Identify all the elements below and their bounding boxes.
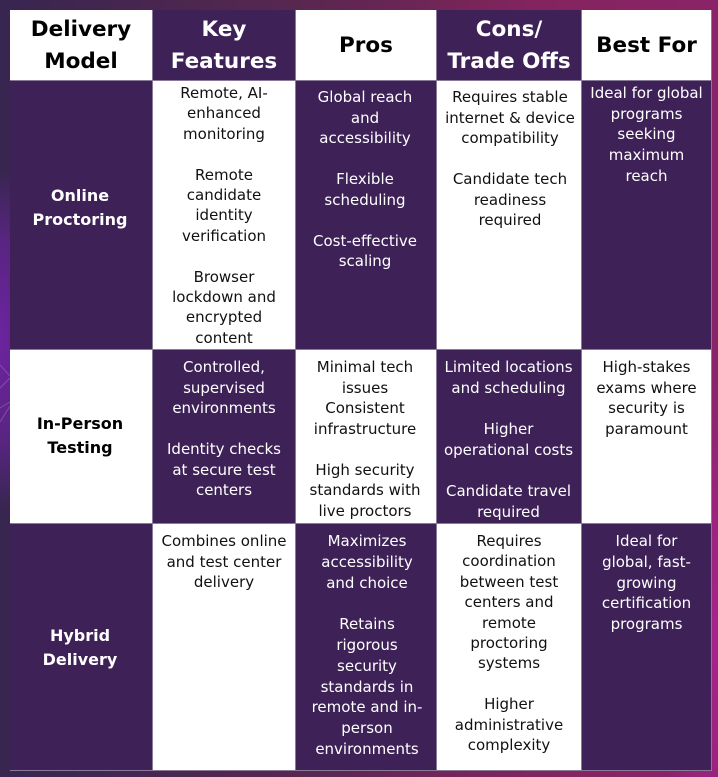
in-person: cons: and scheduling xyxy=(451,379,566,397)
in-person: best for: High-stakes xyxy=(602,358,690,376)
in-person: key features xyxy=(153,350,296,524)
hybrid: key features: delivery xyxy=(194,573,254,591)
row label: In-Person Testing: In-Person xyxy=(37,414,123,433)
row label: In-Person Testing: Testing xyxy=(47,438,113,457)
online: key features: enhanced xyxy=(187,104,261,122)
in-person: cons: operational costs xyxy=(444,441,573,459)
online: cons: Candidate tech xyxy=(453,170,567,188)
hybrid: cons: proctoring xyxy=(470,634,548,652)
header: Delivery Model xyxy=(10,10,153,81)
hybrid: cons xyxy=(437,524,582,771)
hybrid: pros: environments xyxy=(315,740,419,758)
in-person: best for: paramount xyxy=(605,420,688,438)
online: key features: Remote, AI- xyxy=(180,84,268,102)
header: Pros xyxy=(296,10,437,81)
in-person: cons: Limited locations xyxy=(444,358,573,376)
online: key features: candidate xyxy=(187,186,261,204)
row label: In-Person Testing xyxy=(10,350,153,524)
hybrid: best for: certification xyxy=(602,594,691,612)
header: Delivery Model: Delivery xyxy=(31,17,131,42)
in-person: pros: Consistent xyxy=(325,399,405,417)
online: pros: Flexible xyxy=(336,170,394,188)
hybrid: pros: and choice xyxy=(326,574,408,592)
in-person: key features: at secure test xyxy=(172,460,276,478)
hybrid: cons: remote xyxy=(482,614,536,632)
row label: Hybrid Delivery: Delivery xyxy=(43,650,117,669)
online: pros: and xyxy=(351,108,379,126)
online: pros: accessibility xyxy=(319,129,411,147)
online: key features: verification xyxy=(182,227,266,245)
online: key features: Remote xyxy=(195,166,253,184)
header: Best For xyxy=(582,10,712,81)
in-person: cons xyxy=(437,350,582,524)
hybrid: best for: programs xyxy=(611,615,682,633)
hybrid: pros: remote and in- xyxy=(312,698,422,716)
row label: Hybrid Delivery xyxy=(10,524,153,771)
online: cons: Requires stable xyxy=(452,88,568,106)
in-person: best for: exams where xyxy=(596,378,697,396)
header: Key Features xyxy=(153,10,296,81)
online: cons: readiness xyxy=(474,190,546,208)
in-person: cons: Higher xyxy=(484,420,533,438)
online: best for: reach xyxy=(625,167,668,185)
online: cons: internet & device xyxy=(445,108,575,126)
network lines left xyxy=(0,364,10,422)
online: pros: Cost-effective xyxy=(313,232,417,250)
in-person: best for: security is xyxy=(608,399,685,417)
online: pros: scheduling xyxy=(324,190,406,208)
online: best for: seeking xyxy=(617,125,676,143)
in-person: key features: centers xyxy=(196,481,252,499)
hybrid: pros: Retains xyxy=(339,615,395,633)
hybrid: cons: centers and xyxy=(464,593,554,611)
hybrid: best for: global, fast- xyxy=(602,553,691,571)
in-person: pros: standards with xyxy=(310,481,420,499)
hybrid: pros: rigorous xyxy=(336,636,398,654)
hybrid: cons: administrative xyxy=(455,716,563,734)
in-person: cons: Candidate travel xyxy=(446,482,571,500)
online: best for xyxy=(582,81,712,350)
hybrid: cons: systems xyxy=(478,654,540,672)
row label: Hybrid Delivery: Hybrid xyxy=(50,626,110,645)
hybrid: pros xyxy=(296,524,437,771)
online: pros: scaling xyxy=(339,252,391,270)
in-person: pros: live proctors xyxy=(318,502,412,520)
hybrid: pros: accessibility xyxy=(321,553,413,571)
hybrid: best for: Ideal for xyxy=(616,532,677,550)
header: Cons / Trade Offs xyxy=(437,10,582,81)
hybrid: cons: Higher xyxy=(484,695,534,713)
header: Delivery Model: Model xyxy=(44,48,118,74)
row label: Online Proctoring xyxy=(10,81,153,350)
row label: Online Proctoring: Proctoring xyxy=(33,210,127,229)
header: Key Features: Features xyxy=(171,48,277,74)
in-person: pros: issues xyxy=(342,378,388,396)
hybrid: cons: coordination xyxy=(462,552,556,570)
in-person: key features: supervised xyxy=(183,378,265,396)
online: key features: content xyxy=(195,329,253,347)
hybrid: pros: Maximizes xyxy=(328,532,406,550)
hybrid: pros: security xyxy=(337,657,397,675)
online: best for: maximum xyxy=(609,146,684,164)
header: Best For: Best For xyxy=(596,33,697,58)
hybrid: cons: Requires xyxy=(476,532,542,550)
hybrid: key features xyxy=(153,524,296,771)
online: cons: compatibility xyxy=(461,129,559,147)
online: key features xyxy=(153,81,296,350)
in-person: pros: infrastructure xyxy=(314,420,416,438)
header: Pros: Pros xyxy=(339,33,393,58)
in-person: cons: required xyxy=(477,503,540,521)
header: Cons / Trade Offs: Cons/ xyxy=(476,17,542,42)
hybrid: best for: growing xyxy=(616,574,676,592)
online: pros xyxy=(296,81,437,350)
header: Cons / Trade Offs: Trade Offs xyxy=(447,48,571,74)
row label: Online Proctoring: Online xyxy=(51,186,109,205)
online: key features: monitoring xyxy=(183,125,265,143)
hybrid: best for xyxy=(582,524,712,771)
in-person: key features: Controlled, xyxy=(183,358,265,376)
online: best for: programs xyxy=(611,105,682,123)
in-person: best for xyxy=(582,350,712,524)
in-person: key features: Identity checks xyxy=(167,440,281,458)
online: key features: lockdown and xyxy=(172,288,276,306)
hybrid: key features: and test center xyxy=(167,552,281,570)
in-person: pros: Minimal tech xyxy=(317,358,413,376)
in-person: key features: environments xyxy=(172,399,276,417)
online: cons xyxy=(437,81,582,350)
hybrid: pros: standards in xyxy=(321,678,413,696)
in-person: pros: High security xyxy=(315,460,415,478)
online: best for: Ideal for global xyxy=(590,84,703,102)
hybrid: key features: Combines online xyxy=(161,532,287,550)
online: key features: identity xyxy=(195,206,253,224)
hybrid: cons: between test xyxy=(460,573,558,591)
hybrid: pros: person xyxy=(341,719,393,737)
in-person: pros xyxy=(296,350,437,524)
online: key features: encrypted xyxy=(186,308,262,326)
online: cons: required xyxy=(479,211,541,229)
header: Key Features: Key xyxy=(202,17,246,42)
online: key features: Browser xyxy=(194,268,254,286)
online: pros: Global reach xyxy=(318,88,412,106)
hybrid: cons: complexity xyxy=(468,736,550,754)
